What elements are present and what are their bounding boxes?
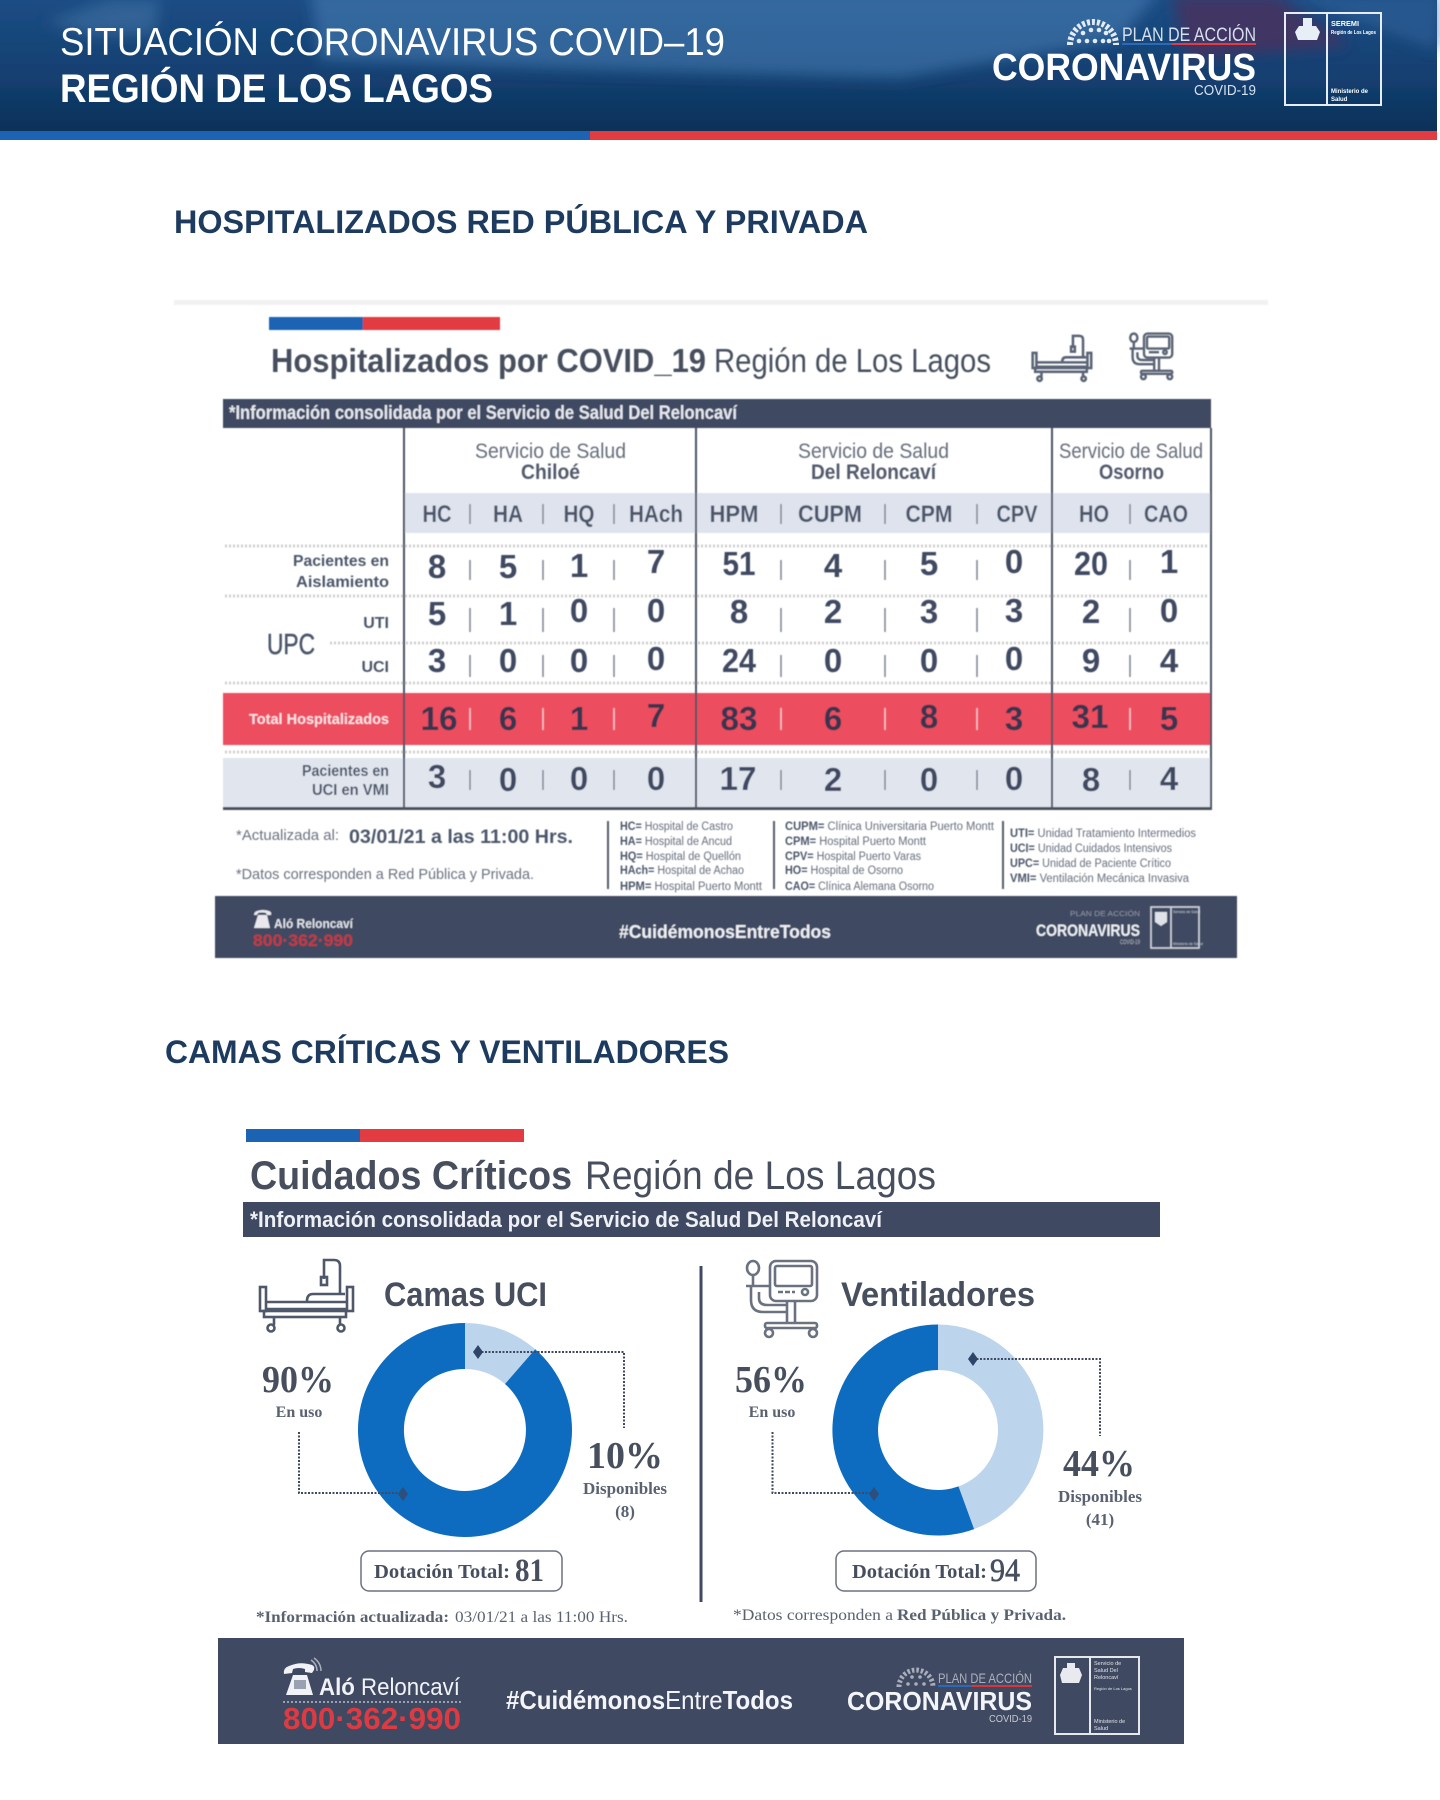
row: UTI: 1 [499,595,517,632]
row: pacientes en aislamiento: 7 [647,543,665,580]
row: pacientes en aislamiento: 4 [824,547,843,584]
legend: abbreviations: UTI= Unidad Tratamiento Intermedios [1010,828,1196,840]
row: UCI: 0 [647,640,665,677]
update note: *Actualizada al: [236,827,339,844]
heading: camas críticas: CAMAS CRÍTICAS Y VENTILADORES [165,1034,729,1070]
row: total hospitalizados: 6 [499,700,517,737]
ministry logo: Región de Los Lagos [1331,30,1376,36]
hospital column codes: HQ [564,501,594,528]
table footer bar: 800·362·990 [253,931,353,950]
plan de acción logo [992,22,1256,99]
row labels: UPC [267,629,315,661]
table footer bar: Aló Reloncaví [274,916,353,931]
callout: 10% disponibles: Disponibles [583,1479,667,1498]
info bar: *Información consolidada por el Servicio de Salud Del Reloncaví [229,403,738,424]
row: UTI: 8 [730,593,748,630]
hospital column codes: CAO [1144,501,1188,528]
service group headers: Servicio de Salud [475,440,626,463]
row labels: Pacientes en [293,553,389,570]
service group headers [475,440,1203,484]
service group headers: Servicio de Salud [1059,440,1203,463]
legend: abbreviations: UPC= Unidad de Paciente Crítico [1010,858,1171,870]
row: total hospitalizados: 16 [420,700,458,737]
plan de acción logo: PLAN DE ACCIÓN [1122,24,1256,46]
service group headers: Osorno [1099,461,1164,484]
panel title [271,342,991,379]
row: pacientes UCI en VMI: 3 [428,758,446,795]
row: pacientes UCI en VMI: 8 [1082,761,1100,798]
legend: abbreviations: HO= Hospital de Osorno [785,865,903,877]
legend: abbreviations: HAch= Hospital de Achao [620,865,744,877]
row labels: UTI [363,615,389,632]
row: UCI: 0 [920,642,938,679]
ministry logo: Salud [1331,97,1348,103]
plan de acción logo [847,1670,1032,1725]
heading: ventiladores: Ventiladores [841,1276,1035,1314]
dotación total: 94: 94 [990,1553,1020,1589]
icon: hospital bed [1033,336,1091,381]
hospital column codes [422,501,1188,528]
row: pacientes UCI en VMI: 17 [720,760,756,797]
row: pacientes UCI en VMI: 0 [499,761,517,798]
ministry logo: SEREMI [1331,19,1359,28]
row labels: Aislamiento [296,574,389,591]
row: pacientes UCI en VMI [428,758,1179,798]
heading: camas uci: Camas UCI [384,1276,547,1314]
table footer bar [215,896,1237,958]
panel title: Región de Los Lagos [714,342,991,379]
service group headers: Servicio de Salud [798,440,949,463]
hospital column codes: HAch [629,501,683,528]
dotación total: 94: Dotación Total: [852,1561,987,1583]
row: pacientes en aislamiento [428,543,1178,585]
row: UCI [428,640,1179,679]
row: pacientes en aislamiento: 0 [1005,543,1023,580]
row: UTI: 3 [920,593,938,630]
icon: hospital bed [260,1260,353,1332]
callout: 44% disponibles [968,1352,1142,1529]
callout: 10% disponibles: (8) [615,1502,635,1521]
table footer bar: PLAN DE ACCIÓN [1070,909,1140,918]
callout: 56% en uso [735,1359,879,1501]
footnote: datos corresponden [733,1607,1066,1624]
dotación total: 81 [361,1551,562,1591]
callout: 90% en uso: En uso [276,1404,322,1421]
header title: REGIÓN DE LOS LAGOS [60,65,493,111]
icon: telephone [284,1658,321,1695]
panel title: Cuidados Críticos [250,1154,572,1198]
row: UTI [428,592,1178,632]
row: pacientes UCI en VMI: 0 [920,761,938,798]
callout: 44% disponibles: Disponibles [1058,1487,1142,1506]
hospital column codes: CPM [906,501,952,528]
ministry logo [1285,13,1381,105]
table bands [223,428,1211,810]
footnote: información actualizada: 03/01/21 a las 11:00 Hrs. [455,1609,628,1626]
header title: SITUACIÓN CORONAVIRUS COVID–19 [60,21,725,64]
legend: abbreviations: HQ= Hospital de Quellón [620,851,741,863]
panel title: Hospitalizados por COVID_19 [271,342,706,379]
info bar [223,399,1211,428]
legend: abbreviations [608,821,1196,893]
hospital column codes: HC [422,501,452,528]
update note: 03/01/21 a las 11:00 Hrs. [349,827,573,848]
panel: hospitalizados table [174,300,1268,958]
footnote: datos corresponden: *Datos corresponden a [733,1607,893,1624]
dotación total: 94 [836,1551,1036,1591]
row labels [249,553,389,799]
footnote: datos corresponden: Red Pública y Privada. [897,1607,1066,1624]
footer bar: 800·362·990 [283,1701,461,1736]
ministry logo: Ministerio de [1331,89,1369,95]
update note [236,827,573,883]
footer bar: #CuidémonosEntreTodos [506,1685,793,1715]
row: UCI: 9 [1082,642,1100,679]
service group headers: Del Reloncaví [811,461,937,484]
row: pacientes UCI en VMI: 0 [1005,760,1023,797]
row: pacientes en aislamiento: 1 [1160,543,1178,580]
row: total hospitalizados: 8 [920,698,938,735]
row: UCI: 0 [1005,640,1023,677]
update note: *Datos corresponden a Red Pública y Privada. [236,866,534,883]
row: UCI: 0 [570,642,588,679]
footer bar [218,1638,1184,1744]
row: UTI: 0 [1160,592,1178,629]
row: total hospitalizados [420,697,1178,737]
row: UTI: 0 [647,592,665,629]
ministry logo: Región de Los Lagos [1094,1686,1132,1691]
hospital column codes: HA [493,501,523,528]
donut chart: camas uci [358,1323,572,1537]
row labels: Pacientes en [302,763,389,780]
panel title: Región de Los Lagos [585,1154,936,1198]
heading: hospitalizados: HOSPITALIZADOS RED PÚBLICA Y PRIVADA [174,204,868,240]
plan de acción logo: COVID-19 [1194,82,1256,99]
title stripe [246,1129,524,1142]
dotación total: 81: 81 [515,1553,544,1589]
callout: 90% en uso: 90% [262,1359,334,1401]
row: UCI: 3 [428,642,446,679]
row: total hospitalizados: 5 [1160,700,1178,737]
hospital column codes: CUPM [798,501,862,528]
row: pacientes en aislamiento: 8 [428,548,446,585]
row: pacientes en aislamiento: 5 [920,545,938,582]
callout: 90% en uso [262,1359,408,1501]
info bar [243,1202,1160,1237]
row: UCI: 24 [722,642,757,679]
info bar: *Información consolidada por el Servicio de Salud Del Reloncaví [250,1207,883,1232]
ministry logo: Salud Del [1094,1668,1118,1674]
row: pacientes en aislamiento: 20 [1074,545,1108,582]
legend: abbreviations: CAO= Clínica Alemana Osorno [785,881,934,893]
row: pacientes en aislamiento: 51 [722,545,756,582]
callout: 56% en uso: En uso [749,1404,795,1421]
row labels: UCI [361,659,389,676]
footer bar: Aló Reloncaví [319,1674,460,1701]
row: pacientes UCI en VMI: 0 [647,760,665,797]
header title [60,21,725,111]
header banner [0,0,1437,140]
table footer bar: Servicio de Salud [1173,910,1200,914]
legend: abbreviations: CPV= Hospital Puerto Varas [785,851,921,863]
table footer bar: CORONAVIRUS [1036,921,1140,940]
icon: ventilator [746,1261,817,1337]
ministry logo: Salud [1094,1726,1108,1732]
row: pacientes en aislamiento: 5 [499,548,517,585]
row: pacientes UCI en VMI: 0 [570,760,588,797]
row: UTI: 2 [1082,593,1100,630]
service group headers: Chiloé [521,461,580,484]
table footer bar: Ministerio de Salud [1173,942,1203,946]
legend: abbreviations: HPM= Hospital Puerto Montt [620,881,763,893]
panel title [250,1154,936,1198]
callout: 44% disponibles: (41) [1086,1510,1114,1529]
row: UTI: 5 [428,595,446,632]
legend: abbreviations: UCI= Unidad Cuidados Intensivos [1010,843,1172,855]
hospital column codes: HPM [710,501,758,528]
donut chart: ventiladores [832,1324,1043,1536]
row: pacientes UCI en VMI: 4 [1160,760,1179,797]
ministry logo: Ministerio de [1094,1719,1125,1725]
legend: abbreviations: CUPM= Clínica Universitaria Puerto Montt [785,821,995,833]
legend: abbreviations: HC= Hospital de Castro [620,821,733,833]
title stripe [269,317,500,330]
row: UCI: 0 [499,642,517,679]
table footer bar: #CuidémonosEntreTodos [619,922,831,942]
row: UCI: 0 [824,642,842,679]
plan de acción logo: COVID-19 [989,1714,1032,1725]
row: total hospitalizados: 3 [1005,700,1023,737]
row: total hospitalizados: 6 [824,700,842,737]
row: total hospitalizados: 31 [1072,698,1108,735]
callout: 44% disponibles: 44% [1063,1443,1135,1485]
callout: 10% disponibles: 10% [587,1435,663,1477]
row labels: UCI en VMI [312,782,389,799]
row: total hospitalizados: 83 [720,700,758,737]
row: UTI: 0 [570,592,588,629]
footnote: información actualizada [256,1609,628,1626]
plan de acción logo: CORONAVIRUS [992,47,1256,89]
legend: abbreviations: HA= Hospital de Ancud [620,836,732,848]
dotación total: 81: Dotación Total: [374,1561,510,1583]
row: UTI: 2 [824,593,842,630]
plan de acción logo: CORONAVIRUS [847,1686,1032,1716]
table footer bar: COVID-19 [1120,940,1140,946]
hospital column codes: CPV [996,501,1038,528]
legend: abbreviations: CPM= Hospital Puerto Montt [785,836,927,848]
ministry logo: Reloncaví [1094,1675,1119,1681]
divider [700,1266,702,1602]
row labels: Total Hospitalizados [249,711,389,728]
row: pacientes en aislamiento: 1 [570,547,588,584]
row: pacientes UCI en VMI: 2 [824,761,842,798]
row: total hospitalizados: 1 [570,700,588,737]
callout: 56% en uso: 56% [735,1359,807,1401]
plan de acción logo: PLAN DE ACCIÓN [938,1670,1032,1686]
panel: cuidados críticos [218,1129,1184,1744]
callout: 10% disponibles [473,1345,667,1521]
hospital column codes: HO [1079,501,1109,528]
ministry logo [1055,1657,1139,1734]
ministry logo: Servicio de [1094,1661,1121,1667]
row: UTI: 3 [1005,592,1023,629]
row: UCI: 4 [1160,642,1179,679]
footnote: información actualizada: *Información actualizada: [256,1609,449,1626]
icon: ventilator [1130,334,1172,379]
row: total hospitalizados: 7 [647,697,665,734]
legend: abbreviations: VMI= Ventilación Mecánica Invasiva [1010,873,1190,885]
